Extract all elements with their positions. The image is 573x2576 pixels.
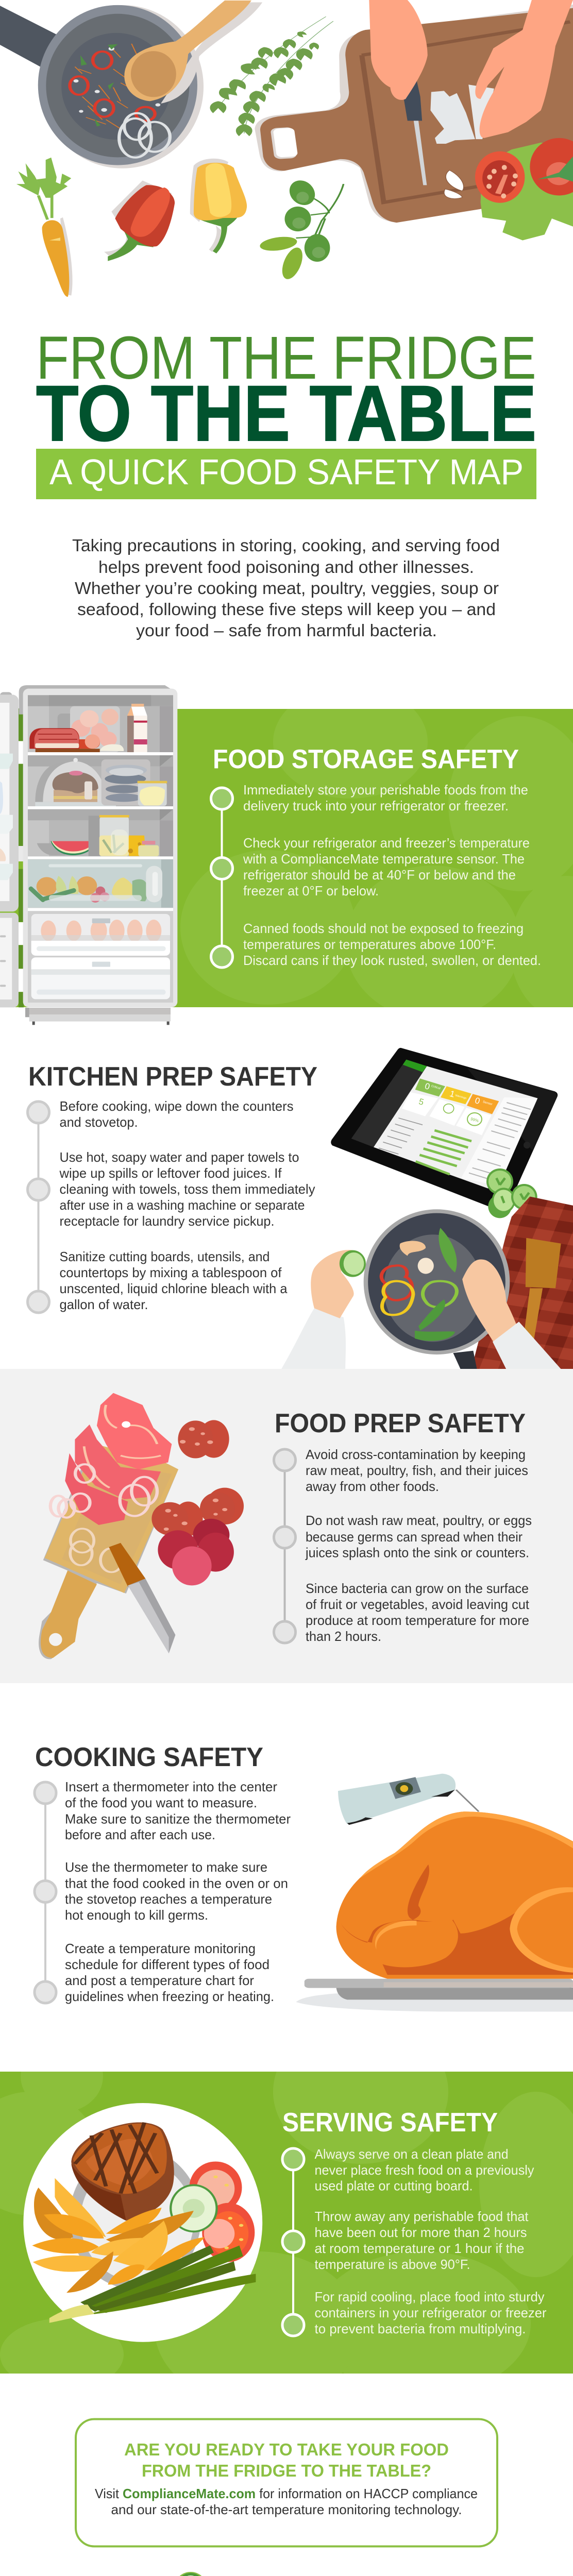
icon: frying pan [0,5,204,168]
text block: use thermometer: that the food cooked in the oven or on [65,1875,288,1891]
left hand with cucumber [281,1250,366,1369]
icon: whole tomato [530,138,573,195]
text block: store [243,782,528,814]
logo: ComplianceMate [175,2572,398,2576]
intro text [72,536,500,640]
text block: paper towels: Use hot, soapy water and paper towels to [60,1149,299,1165]
heading: FOOD PREP SAFETY [275,1409,526,1438]
vegetables in pan [381,1228,457,1341]
turkey body [336,1811,573,1979]
title [36,324,536,457]
food: fish tray [102,759,150,805]
illustration: hero cooking scene [0,0,573,297]
text block: paper towels: after use in a washing machine or separate [60,1197,305,1213]
cutting board [39,1444,178,1659]
timeline [274,1449,296,1643]
green onions [49,2245,256,2323]
text block: rapid cooling: containers in your refrigerator or freezer [314,2305,547,2320]
panel: food storage safety [0,709,573,1007]
dashboard cards: 0 [474,1095,481,1106]
panel: cooking safety [35,1742,291,2004]
text block: paper towels: cleaning with towels, toss them immediately [60,1181,315,1197]
CTA body [95,2486,478,2517]
CTA heading [124,2441,449,2481]
text block: store: delivery truck into your refrigerator or freezer. [243,798,509,814]
panel: serving safety [0,2072,573,2374]
illustration: meat on cutting board [39,1393,244,1659]
text block: rapid cooling [314,2289,547,2336]
text block: insert thermometer: Make sure to sanitize the thermometer [65,1811,291,1827]
text block: schedule: and post a temperature chart for [65,1973,254,1988]
fridge base [25,1008,171,1025]
text block: do not wash: because germs can spread when their [306,1529,523,1545]
food: corn jar [138,781,167,806]
text block: bacteria: than 2 hours. [306,1629,381,1644]
icon: red pepper [104,180,175,261]
food: pickle jar [89,815,129,856]
icon: left hand [369,0,428,100]
text block: throw away: at room temperature or 1 hour if the [314,2241,525,2256]
text block: canned: temperatures or temperatures above 100°F. [243,937,496,952]
subtitle banner: A QUICK FOOD SAFETY MAP [49,452,524,492]
cucumber slice [170,2184,218,2232]
text block: rapid cooling: to prevent bacteria from multiplying. [314,2321,526,2336]
food: cheese and small jar [128,836,159,856]
text block: paper towels: receptacle for laundry service pickup. [60,1213,274,1229]
text block: store: Immediately store your perishable foods from the [243,782,528,798]
onion rings [50,1464,157,1518]
intro text: Taking precautions in storing, cooking, and serving food [72,536,500,555]
screen [351,1060,537,1189]
text block: wipe down: and stovetop. [60,1114,138,1130]
fridge body [19,685,177,1007]
dashboard cards [402,1078,499,1135]
text block: clean plate: never place fresh food on a previously [314,2162,534,2178]
timeline [28,1101,49,1313]
progress bars [416,1130,471,1174]
dashboard cards: 0 [424,1081,431,1092]
icon: wooden spoon [124,1,262,104]
text block: canned: Canned foods should not be exposed to freezing [243,921,524,936]
plate [23,2103,262,2342]
food: meat and sausages [29,706,124,752]
text block: bacteria: of fruit or vegetables, avoid leaving cut [306,1597,530,1612]
text block: clean plate: Always serve on a clean plate and [314,2146,508,2162]
food: watermelon [37,841,96,855]
text block: check: freezer at 0°F or below. [243,883,379,899]
text block: throw away [314,2209,529,2272]
shelves [28,752,173,911]
text block: insert thermometer [65,1779,291,1842]
text block: sanitize: countertops by mixing a tablespoon of [60,1265,282,1280]
text block: do not wash: juices splash onto the sink or counters. [305,1545,529,1560]
text block: check: refrigerator should be at 40°F or below and the [243,867,516,883]
text block: schedule: schedule for different types of food [65,1957,269,1972]
text block: throw away: have been out for more than 2 hours [314,2225,527,2240]
intro text: your food – safe from harmful bacteria. [136,621,437,640]
CTA heading: ARE YOU READY TO TAKE YOUR FOOD [124,2441,449,2460]
text block: sanitize: Sanitize cutting boards, utensils, and [60,1249,270,1264]
illustration: roast turkey with thermometer [296,1774,573,2012]
heading: FOOD STORAGE SAFETY [213,744,519,774]
text block: check [243,835,530,899]
cucumber slices [486,1168,537,1218]
text block: clean plate [314,2146,534,2194]
text block: schedule: Create a temperature monitoring [65,1941,256,1956]
text block: wipe down: Before cooking, wipe down the counters [60,1098,294,1114]
call to action box [76,2419,497,2546]
text block: do not wash [305,1513,532,1560]
text block: sanitize: unscented, liquid chlorine bleach with a [60,1281,288,1296]
text block: check: with a ComplianceMate temperature sensor. The [243,851,525,867]
text block: sanitize [60,1249,288,1312]
text block: throw away: temperature is above 90°F. [314,2257,470,2272]
text block: schedule: guidelines when freezing or heating. [65,1989,274,2004]
panel: food prep safety [0,1369,573,1683]
dashboard cards: Sensor [482,1100,493,1106]
text block: insert thermometer: before and after each use. [65,1827,215,1842]
dashboard cards: 1 [449,1089,456,1099]
icon: thyme sprigs [210,16,333,136]
CTA heading: FROM THE FRIDGE TO THE TABLE? [142,2462,431,2481]
text block: clean plate: used plate or cutting board. [314,2178,473,2194]
tray shadow [296,1992,573,2012]
heading: COOKING SAFETY [35,1742,263,1772]
dashboard cards: 5 [418,1096,425,1107]
food: milk carton [127,704,147,752]
meat drawers [28,911,173,1003]
crisper drawer with produce [28,859,173,908]
illustration: cooking pan, hands and tablecloth [281,1197,573,1369]
text block: use thermometer: hot enough to kill germs. [65,1907,208,1923]
heading: SERVING SAFETY [282,2108,498,2138]
text block: paper towels [59,1149,315,1229]
dashboard cards: 99% [470,1116,479,1123]
text block: wipe down [60,1098,294,1130]
knife [109,1543,175,1653]
text block: insert thermometer: Insert a thermometer into the center [65,1779,277,1794]
icon: cut tomato [475,151,525,203]
icon: yellow pepper [190,159,247,253]
panel: kitchen prep safety [28,1062,317,1313]
food: covered cake [35,758,116,806]
CTA body: Visit ComplianceMate.com for information on HACCP compliance [95,2486,478,2501]
text block: check: Check your refrigerator and freezer’s temperature [243,835,530,851]
text block: canned: Discard cans if they look rusted, swollen, or dented. [243,953,541,968]
icon: garlic slices [444,170,464,199]
text block: cross contamination [306,1447,528,1494]
icon: map pin with fork and spoon [175,2572,207,2576]
text block: bacteria: Since bacteria can grow on the surface [306,1581,529,1596]
task list [469,1103,531,1180]
icon: right hand [475,0,573,138]
text block: sanitize: gallon of water. [60,1297,148,1312]
icon: olive branch [258,179,344,280]
icon: cutting board [255,5,573,223]
salami slices [151,1420,244,1585]
timeline [282,2148,304,2336]
text block: rapid cooling: For rapid cooling, place food into sturdy [314,2289,544,2304]
text block: cross contamination: away from other foods. [306,1479,439,1494]
icon: lettuce [481,143,573,240]
text block: use thermometer: the stovetop reaches a temperature [65,1891,272,1907]
intro text: helps prevent food poisoning and other illnesses. [98,557,474,577]
roasting tray [305,1979,573,1999]
dashboard cards: Critical [431,1084,441,1090]
text block: do not wash: Do not wash raw meat, poultry, or eggs [306,1513,532,1528]
illustration: open fridge [0,680,177,1025]
text block: use thermometer [65,1859,288,1923]
fridge door left [0,692,19,1007]
illustration: plate of food [23,2103,262,2342]
intro text: Whether you’re cooking meat, poultry, veggies, soup or [75,579,499,598]
text block: bacteria [306,1581,530,1644]
illustration: tablet dashboard [331,1048,558,1218]
tablecloth [471,1197,573,1369]
text block: canned [243,921,541,968]
text block: bacteria: produce at room temperature for more [306,1613,529,1628]
spatula [524,1238,561,1342]
text block: use thermometer: Use the thermometer to make sure [65,1859,267,1875]
tomato slices [189,2161,255,2262]
thermometer [338,1774,479,1825]
icon: carrot [16,158,73,297]
heading: KITCHEN PREP SAFETY [28,1062,317,1092]
timeline [35,1782,56,2003]
CTA body: and our state-of-the-art temperature monitoring technology. [111,2502,462,2517]
white gaps between door and body [0,680,24,1007]
text block: insert thermometer: of the food you want to measure. [65,1795,257,1810]
potato wedges [32,2178,205,2293]
text block: throw away: Throw away any perishable food that [314,2209,529,2224]
pan handle [453,1351,477,1369]
raw meat slices [65,1393,172,1525]
dashboard cards: Warnings [455,1094,467,1100]
text block: cross contamination: Avoid cross-contamination by keeping [306,1447,526,1462]
right hand [462,1259,561,1369]
icon: chopped onion [430,84,494,144]
text block: paper towels: wipe up spills or leftover food juices. If [59,1165,282,1181]
steak [71,2123,174,2221]
pan [364,1209,510,1354]
intro text: seafood, following these five steps will keep you – and [77,600,496,619]
text block: schedule [65,1941,274,2004]
icon: knife [404,66,427,185]
timeline [211,788,233,968]
text block: cross contamination: raw meat, poultry, fish, and their juices [306,1463,528,1478]
